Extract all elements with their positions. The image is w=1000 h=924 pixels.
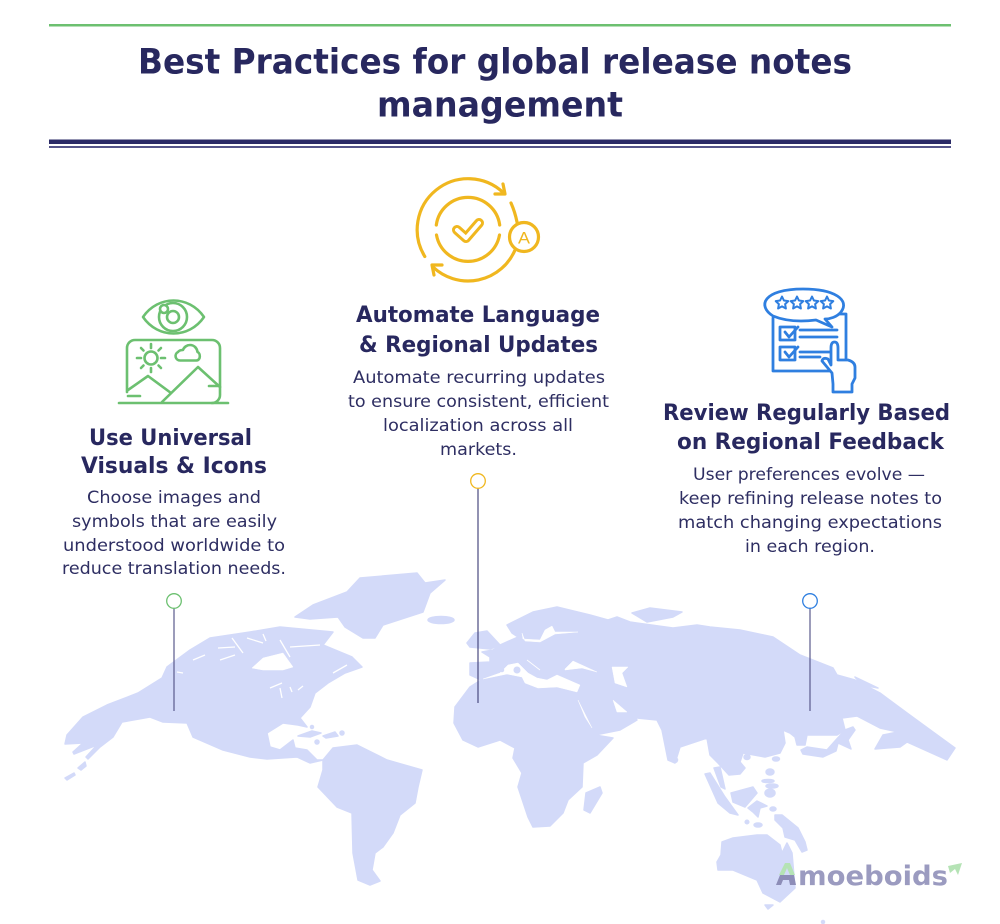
icon: review checklist [765, 289, 855, 392]
body: right: User preferences evolve — [693, 465, 925, 485]
heading: left [81, 426, 267, 479]
body: center: localization across all [383, 416, 573, 436]
map: south america [318, 745, 422, 885]
map: eurasia and africa [454, 607, 955, 827]
right pin [803, 594, 817, 711]
map: hudson bay [252, 653, 293, 670]
icon: automation cycle: A [518, 228, 531, 248]
map: aleutian islands [65, 762, 86, 780]
title double rule [49, 140, 951, 148]
map: italy crease [527, 660, 540, 670]
body: left: symbols that are easily [72, 512, 277, 532]
heading: center [356, 303, 600, 358]
world map [65, 573, 955, 924]
top green rule [49, 24, 951, 26]
map: british isles [467, 631, 500, 649]
body: right: match changing expectations [678, 513, 942, 533]
heading: center: Automate Language [356, 303, 600, 328]
heading: right [663, 401, 950, 455]
map: tasmania [765, 905, 773, 909]
map: madagascar [584, 787, 602, 813]
map: north america [65, 627, 362, 763]
heading: left: Visuals & Icons [81, 454, 267, 479]
map: arctic channels and great lakes [177, 634, 347, 698]
center pin [471, 474, 485, 703]
body: center: markets. [440, 440, 517, 460]
body: right: in each region. [745, 537, 875, 557]
map: japan arc [801, 727, 855, 757]
map: iceland [428, 616, 454, 624]
map: new guinea [775, 815, 807, 852]
left pin [167, 594, 181, 711]
heading: left: Use Universal [89, 426, 252, 451]
body: left: Choose images and [87, 488, 261, 508]
map: mediterranean islands [500, 668, 504, 672]
map: southeast asia islands [705, 767, 767, 817]
heading: center: & Regional Updates [359, 333, 598, 358]
body: right: keep refining release notes to [679, 489, 942, 509]
map: australia [717, 835, 795, 902]
body: left: understood worldwide to [63, 536, 285, 556]
icon: eye and picture [119, 300, 228, 403]
body: left [62, 488, 286, 579]
map: inland seas [483, 626, 628, 728]
icon: automation cycle [417, 179, 538, 281]
body: center: to ensure consistent, efficient [348, 392, 609, 412]
heading: right: Review Regularly Based [663, 401, 950, 426]
map: caribbean islands [298, 731, 338, 738]
title [138, 42, 852, 126]
heading: right: on Regional Feedback [677, 430, 945, 455]
body: left: reduce translation needs. [62, 559, 286, 579]
body: center: Automate recurring updates [353, 368, 605, 388]
body: center [348, 368, 609, 460]
body: right [678, 465, 942, 557]
map: greenland [295, 573, 445, 638]
map: arctic islands [632, 608, 878, 688]
logo: Amoeboids: moeboids [798, 861, 948, 892]
title: management [377, 86, 623, 126]
title: Best Practices for global release notes [138, 42, 852, 82]
